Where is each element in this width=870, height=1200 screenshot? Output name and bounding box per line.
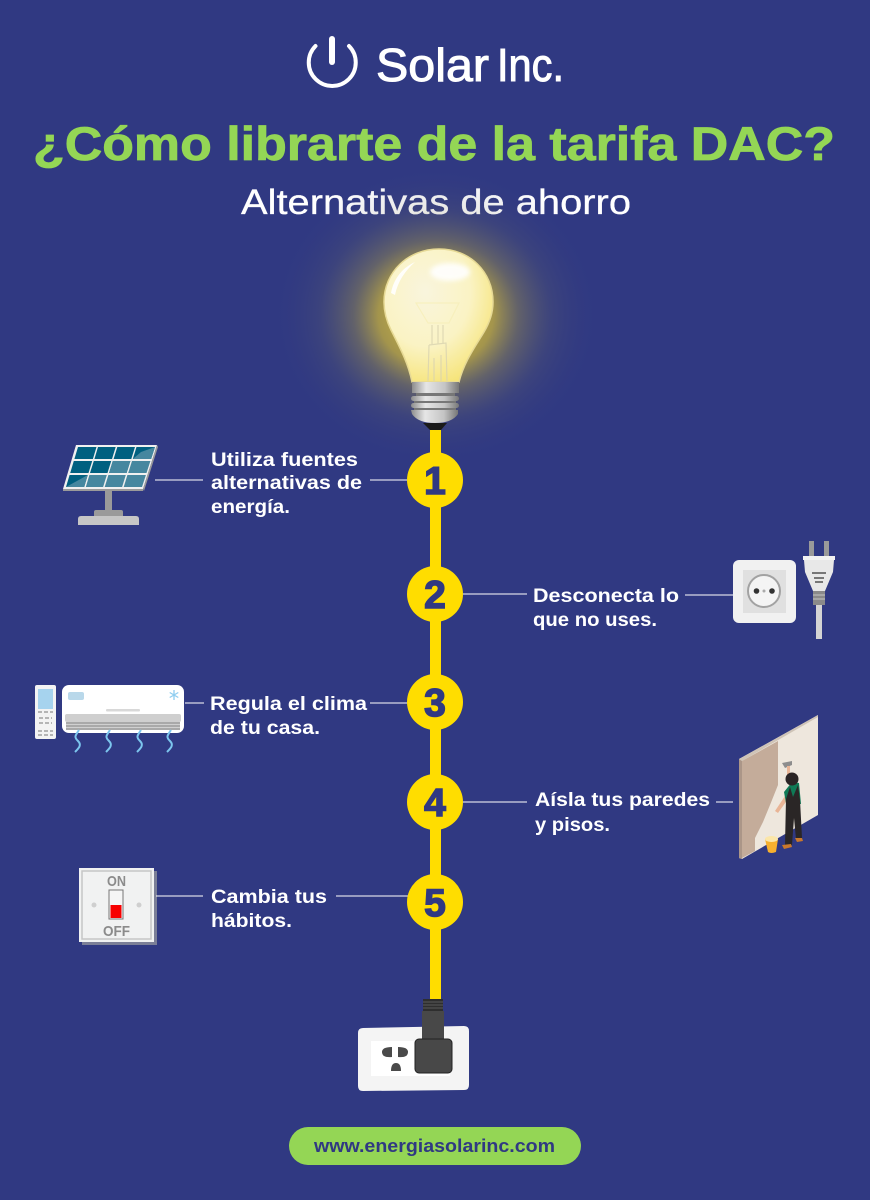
step 1 text: energía. [211, 497, 290, 518]
step 2 text: que no uses. [533, 610, 657, 631]
step 3 text: Regula el clima [210, 694, 367, 715]
step 3 badge [407, 674, 463, 730]
bulb screw base [412, 382, 459, 393]
step 3 text [210, 694, 367, 739]
step 5 text: hábitos. [211, 911, 292, 932]
step 2 text: Desconecta lo [533, 586, 679, 607]
bucket [765, 839, 778, 853]
step 1 badge: 1 [424, 460, 446, 503]
logo wordmark: Solar: Solar [376, 39, 489, 91]
socket holes [382, 1047, 392, 1057]
step 3 badge: 3 [424, 682, 446, 725]
step 5 text: Cambia tus [211, 887, 327, 908]
connector lines [463, 801, 733, 803]
connector lines [463, 594, 733, 595]
remote control [35, 685, 56, 739]
air waves [75, 730, 172, 752]
logo: Solar Inc. [309, 39, 564, 91]
step 2 badge: 2 [424, 574, 446, 617]
step 2 text [533, 586, 679, 631]
step 1 badge [407, 452, 463, 508]
icon: power symbol [309, 39, 356, 86]
step 1 text: Utiliza fuentes [211, 450, 358, 471]
step 3 text: de tu casa. [210, 718, 320, 739]
website pill: www.energiasolarinc.com [313, 1136, 555, 1156]
website pill [289, 1127, 581, 1165]
icon: air conditioner [35, 685, 184, 752]
connector lines [155, 479, 408, 481]
icon: solar panel [63, 445, 158, 525]
step 4 [407, 715, 818, 859]
connector lines [156, 895, 408, 897]
icon: plug [803, 541, 835, 639]
bulb filament [416, 303, 459, 381]
step 2 badge [407, 566, 463, 622]
step 4 badge [407, 774, 463, 830]
step 2 [407, 541, 835, 639]
bulb glass [384, 249, 493, 382]
plug body [415, 1039, 452, 1073]
icon: light bulb [384, 249, 493, 430]
outlet plate [358, 1026, 469, 1091]
icon: outlet with plug [358, 999, 469, 1091]
icon: person insulating wall [739, 715, 818, 859]
step 4 text [535, 790, 710, 836]
step 1 text [211, 450, 362, 518]
step 1 [63, 445, 463, 525]
icon: wall socket [733, 560, 796, 623]
step 5 text [211, 887, 327, 932]
indoor unit [62, 685, 184, 733]
icon: on/off switch: ON [107, 873, 126, 890]
step 4 text: y pisos. [535, 815, 610, 836]
step 1 text: alternativas de [211, 473, 362, 494]
snowflake [170, 690, 178, 700]
step 4 badge: 4 [424, 782, 446, 825]
yellow cable [430, 428, 441, 1002]
icon: on/off switch [79, 868, 157, 945]
step 4 text: Aísla tus paredes [535, 790, 710, 811]
bulb highlight [391, 262, 415, 295]
subtitle: Alternativas de ahorro [241, 183, 631, 222]
cord strain relief [423, 999, 443, 1012]
step 5 [79, 868, 463, 945]
step 5 badge: 5 [424, 882, 446, 925]
step 5 badge [407, 874, 463, 930]
logo wordmark: Inc.: Inc. [497, 39, 564, 91]
icon: on/off switch: OFF [103, 923, 130, 940]
title: ¿Cómo librarte de la tarifa DAC? [33, 117, 835, 170]
worker [775, 761, 803, 849]
icon: light bulb glow [271, 165, 601, 465]
connector lines [185, 702, 408, 704]
step 3 [35, 674, 463, 752]
